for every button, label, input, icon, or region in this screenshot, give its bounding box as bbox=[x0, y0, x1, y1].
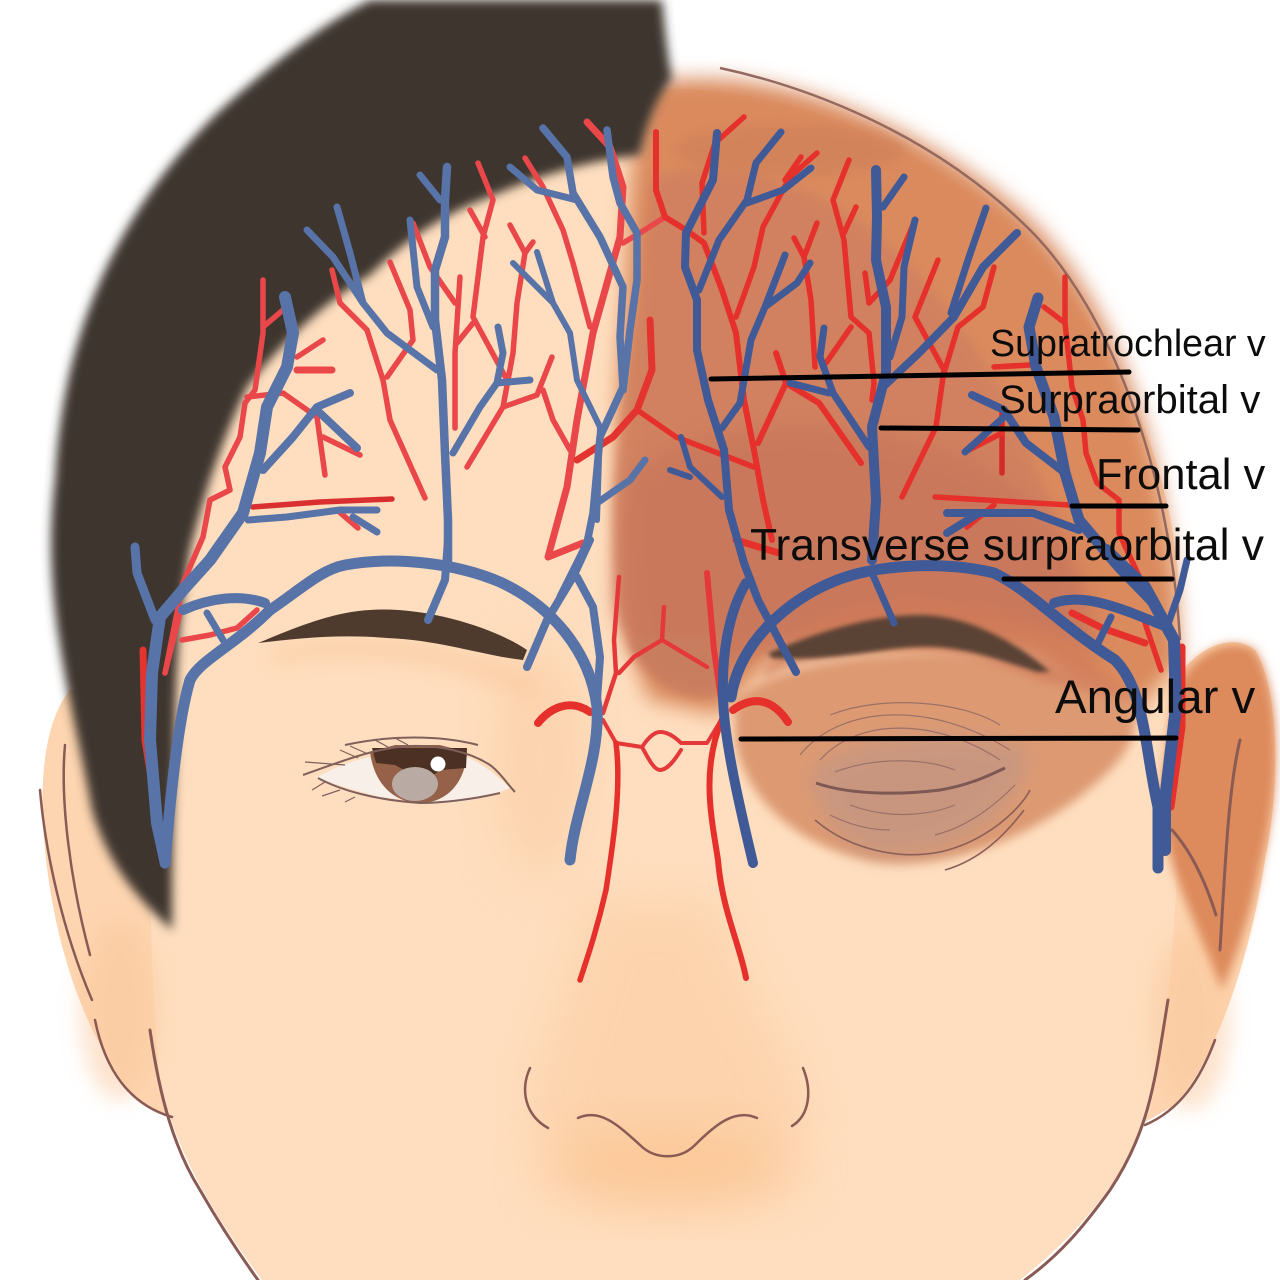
eye socket muscle bbox=[735, 653, 1135, 863]
label: Surpraorbital v: Surpraorbital v bbox=[999, 377, 1260, 422]
left ear bbox=[42, 680, 220, 1118]
iris bbox=[370, 745, 467, 803]
jaw outline right bbox=[1025, 1000, 1168, 1280]
right ear inner lines bbox=[1172, 740, 1240, 950]
nose shading bbox=[529, 900, 810, 1186]
icon: right eyebrow bbox=[768, 615, 1050, 672]
closed eyelid line bbox=[816, 768, 1005, 793]
right nostril wing bbox=[792, 1068, 808, 1126]
nose tip shading bbox=[540, 1130, 800, 1210]
right main veins bbox=[723, 170, 1176, 868]
right brow shading bbox=[760, 600, 1130, 700]
illustration: nose lines bbox=[525, 1068, 808, 1156]
icon: left eyebrow bbox=[258, 609, 527, 660]
left forehead arteries bbox=[143, 122, 665, 790]
right branch veins bbox=[670, 132, 1187, 672]
orange base bbox=[617, 78, 1180, 720]
left branch veins bbox=[207, 128, 645, 700]
eye wrinkles bbox=[815, 790, 1030, 870]
right ear lobe bbox=[1100, 642, 1275, 1125]
eye highlight bbox=[430, 756, 446, 772]
nose base bbox=[578, 1115, 757, 1156]
supraorbital arcade and nose arteries bbox=[538, 701, 788, 980]
illustration: hair bbox=[51, 0, 672, 930]
left cheek edge shading bbox=[80, 920, 160, 1100]
illustration: veins bbox=[135, 128, 1187, 868]
illustration: arteries bbox=[143, 117, 1182, 980]
glabella shadow bbox=[628, 636, 730, 698]
sclera bbox=[317, 757, 510, 803]
label: Frontal v: Frontal v bbox=[1096, 451, 1265, 499]
label: Transverse surpraorbital v: Transverse surpraorbital v bbox=[750, 521, 1265, 570]
iris reflection bbox=[392, 767, 438, 801]
label: Supratrochlear v: Supratrochlear v bbox=[990, 322, 1266, 364]
right forehead arteries bbox=[640, 117, 1182, 807]
central brown muscle bbox=[614, 170, 1090, 674]
face shape bbox=[149, 89, 1181, 1280]
upper patch bbox=[675, 124, 905, 176]
brow shading bbox=[270, 638, 540, 700]
label lines bbox=[711, 372, 1176, 739]
eyelid outlines bbox=[303, 738, 515, 803]
fine eyelid lines bbox=[800, 703, 1015, 835]
panel: exposed muscle forehead bbox=[614, 68, 1276, 990]
label: Angular v: Angular v bbox=[1055, 671, 1256, 724]
eyelashes bbox=[305, 738, 408, 802]
central loop arteries bbox=[603, 717, 723, 770]
forehead outer line bbox=[720, 68, 1180, 640]
right cheek edge shading bbox=[1150, 930, 1230, 1110]
icon: left eye bbox=[303, 738, 515, 803]
lower brown muscle bbox=[615, 426, 1095, 679]
nose bridge shading bbox=[495, 640, 585, 880]
glabella arteries bbox=[603, 573, 723, 713]
left main veins bbox=[135, 297, 597, 863]
face outline bbox=[150, 1030, 258, 1280]
ear outlines bbox=[40, 745, 1215, 1125]
eyelid shading bbox=[810, 735, 1030, 855]
left nostril wing bbox=[525, 1068, 548, 1128]
right ear muscle bbox=[1160, 644, 1276, 990]
pupil shadow bbox=[372, 748, 467, 776]
